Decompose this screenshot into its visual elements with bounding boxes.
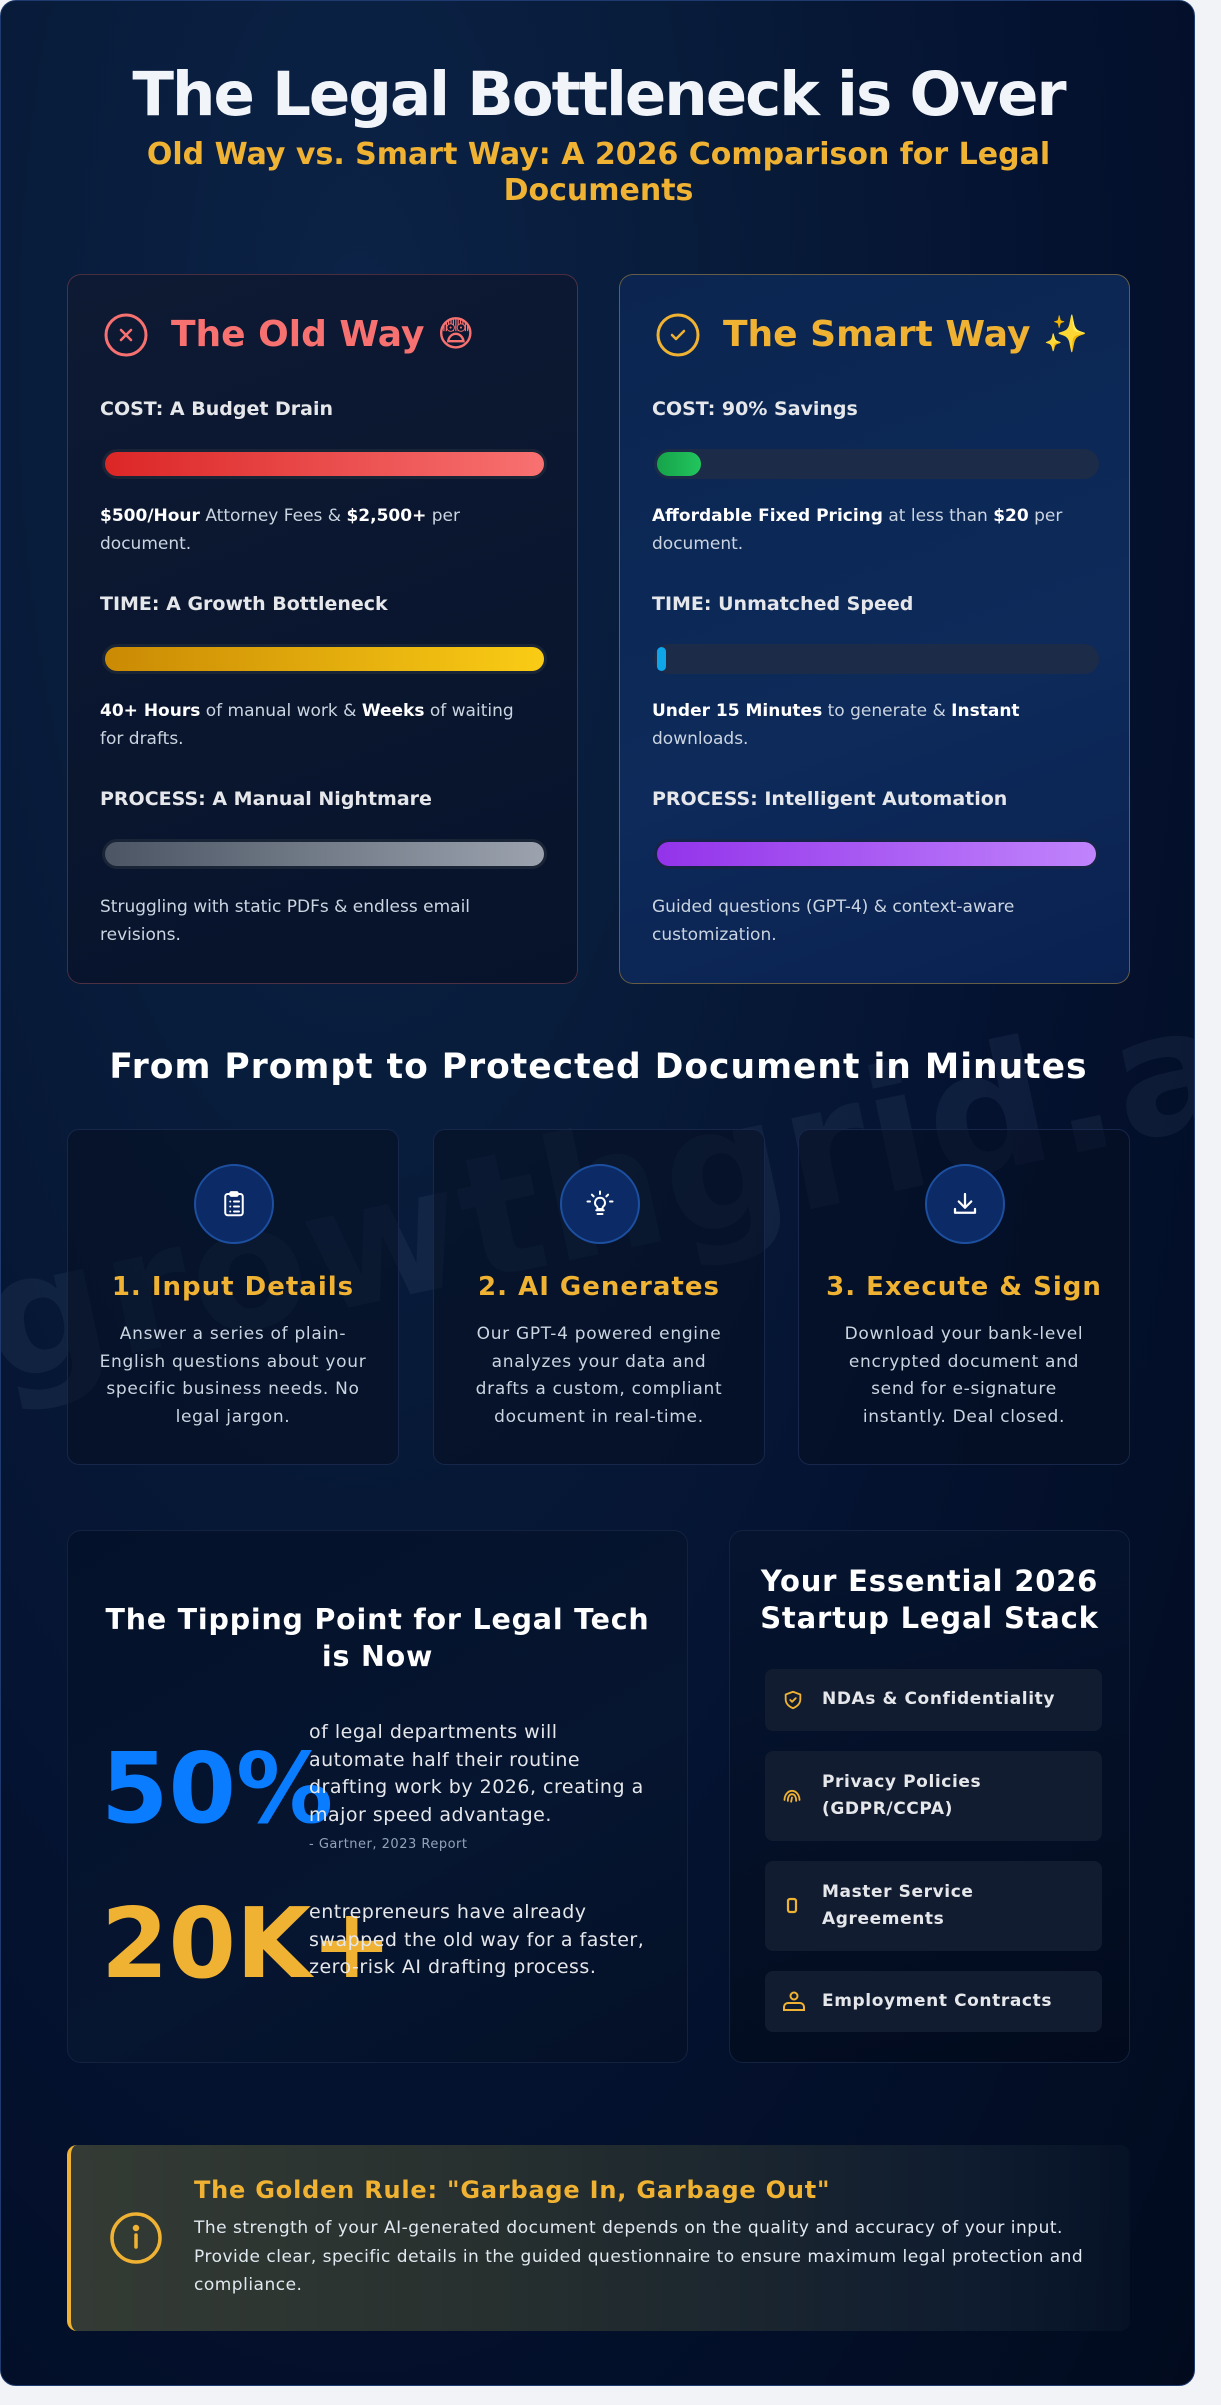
step text: Our GPT-4 powered engine analyzes your data and drafts a custom, compliant document in real-time. (476, 1324, 722, 1426)
panel: old way (67, 274, 578, 984)
callout text: The strength of your AI-generated document depends on the quality and accuracy of your input. Provide clear, specific details in the guided questionnaire to ensure maximum legal protection and compliance. (194, 2218, 1083, 2295)
icon: x circle (104, 314, 148, 356)
process label: PROCESS: A Manual Nightmare (100, 788, 432, 810)
icon: lightbulb (560, 1164, 640, 1244)
item: privacy: Privacy Policies (822, 1772, 981, 1792)
callout title: The Golden Rule: "Garbage In, Garbage Out" (194, 2176, 830, 2204)
time label: TIME: Unmatched Speed (652, 593, 913, 615)
heading: The Old Way 😨 (171, 314, 475, 355)
item: employment (765, 1971, 1102, 2032)
cost bar (102, 449, 547, 479)
icon: clipboard (194, 1164, 274, 1244)
panel: smart way (619, 274, 1130, 984)
item: privacy (765, 1751, 1102, 1841)
item: employment: Employment Contracts (822, 1991, 1052, 2011)
stat: 20K+: 20K+ (101, 1887, 392, 2000)
icon: check circle (656, 314, 700, 356)
item: MSA: Master Service (822, 1882, 974, 1902)
heading: The Smart Way ✨ (723, 314, 1088, 355)
item: NDAs (765, 1669, 1102, 1731)
stat: 20K+ (101, 1887, 644, 2000)
time label: TIME: A Growth Bottleneck (100, 593, 388, 615)
panel: tipping point stats (67, 1530, 688, 2063)
heading: The Tipping Point for Legal Tech is Now (106, 1603, 650, 1673)
step text: Download your bank-level encrypted document and send for e-signature instantly. Deal closed. (845, 1324, 1083, 1426)
heading: Your Essential 2026 Startup Legal Stack (760, 1564, 1099, 1635)
cost label: COST: A Budget Drain (100, 398, 333, 420)
process bar (654, 839, 1099, 869)
time bar (654, 644, 1099, 674)
stat: 50%: of legal departments will automate half their routine drafting work by 2026, creating a major speed advantage. (309, 1721, 644, 1826)
step title: 2. AI Generates (478, 1272, 720, 1302)
time text: 40+ Hours of manual work & Weeks of waiting for drafts. (100, 701, 514, 748)
icon: download (925, 1164, 1005, 1244)
panel: legal stack (729, 1530, 1130, 2063)
cost label: COST: 90% Savings (652, 398, 858, 420)
step text: Answer a series of plain-English questions about your specific business needs. No legal jargon. (100, 1324, 366, 1426)
callout: golden rule (67, 2145, 1130, 2331)
cost text: $500/Hour Attorney Fees & $2,500+ per document. (100, 506, 460, 554)
process text: Struggling with static PDFs & endless email revisions. (100, 897, 470, 944)
item: NDAs: NDAs & Confidentiality (822, 1689, 1055, 1709)
section heading: process: From Prompt to Protected Document in Minutes (109, 1047, 1088, 1087)
time bar (102, 644, 547, 674)
stat: 20K+: entrepreneurs have already swapped the old way for a faster, zero-risk AI drafting process. (309, 1901, 644, 1978)
icon: info (110, 2212, 162, 2264)
step 3 (798, 1129, 1130, 1465)
cost bar (654, 449, 1099, 479)
time text: Under 15 Minutes to generate & Instant downloads. (652, 701, 1020, 748)
process text: Guided questions (GPT-4) & context-aware customization. (652, 897, 1014, 944)
step title: 1. Input Details (112, 1272, 354, 1302)
item: MSA (765, 1861, 1102, 1951)
stat: 50% (101, 1721, 644, 1852)
process bar (102, 839, 547, 869)
step 1 (67, 1129, 399, 1465)
item: MSA: Agreements (822, 1909, 944, 1929)
stat: 50%: - Gartner, 2023 Report (309, 1837, 467, 1852)
title: The Legal Bottleneck is Over (132, 59, 1065, 130)
process label: PROCESS: Intelligent Automation (652, 788, 1007, 810)
step title: 3. Execute & Sign (826, 1272, 1102, 1302)
step 2 (433, 1129, 765, 1465)
subtitle: Old Way vs. Smart Way: A 2026 Comparison for Legal Documents (147, 137, 1050, 208)
item: privacy: (GDPR/CCPA) (822, 1799, 953, 1819)
cost text: Affordable Fixed Pricing at less than $20 per document. (652, 506, 1062, 554)
stat: 50%: 50% (101, 1732, 333, 1845)
